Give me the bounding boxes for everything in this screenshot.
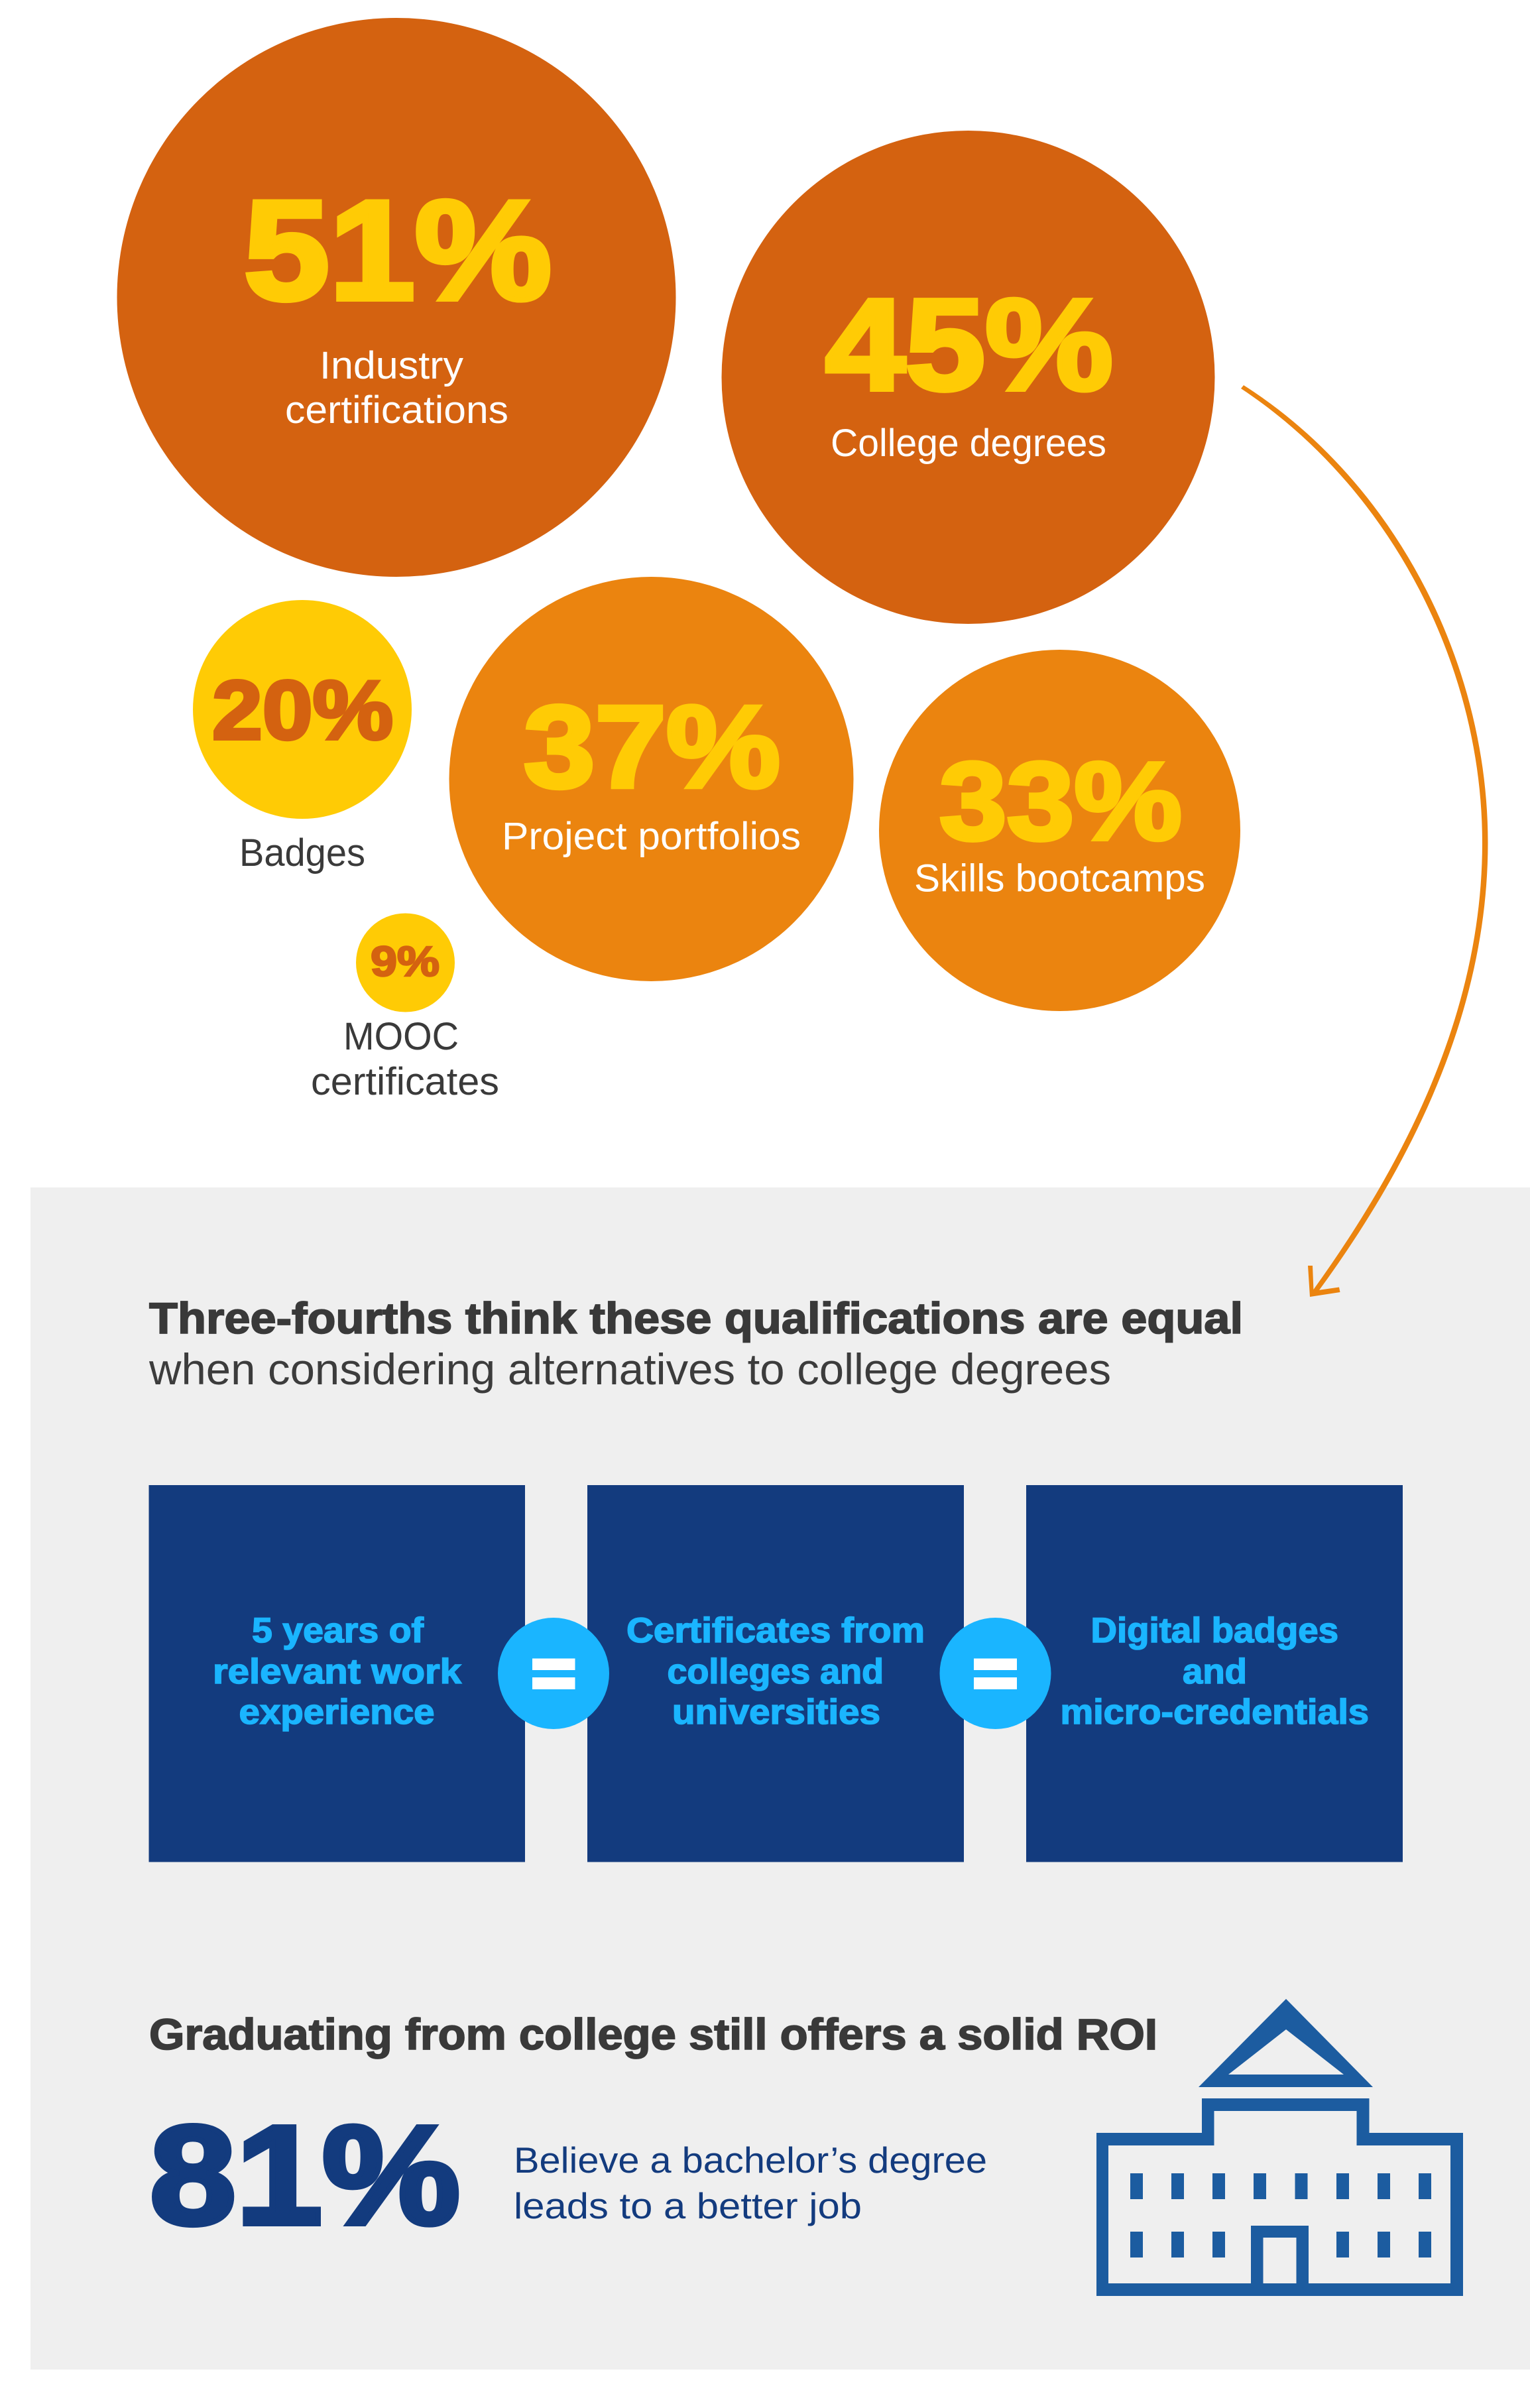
label: MOOC certificates (311, 1015, 499, 1103)
box: 5 years of relevant work experience: 5 years of (252, 1611, 424, 1650)
number: 45%: 45% (825, 272, 1113, 418)
box: 5 years of relevant work experience (148, 1485, 525, 1862)
box: digital badges and micro-credentials: micro-credentials (1061, 1693, 1369, 1732)
label: College degrees: College degrees (831, 422, 1106, 465)
label: Badges: Badges (239, 831, 365, 874)
label: MOOC certificates: certificates (311, 1060, 499, 1103)
stat bubble: 51% industry certifications (117, 18, 676, 577)
arrow: curved from college degrees to panel heading (1241, 385, 1488, 1297)
label: Industry certifications (285, 344, 508, 432)
number: 9%: 9% (371, 937, 440, 985)
heading: three-fourths: when considering alternatives to college degrees (148, 1345, 1111, 1394)
box: certificates from colleges and universities: universities (672, 1693, 880, 1732)
number: 81%: 81% (150, 2096, 460, 2254)
label: Industry certifications: certifications (285, 389, 508, 432)
box: digital badges and micro-credentials: Digital badges (1091, 1611, 1338, 1650)
text: believe a bachelor's degree leads to a better job: Believe a bachelor’s degree (514, 2139, 987, 2181)
stat bubble: 20% badges (193, 600, 412, 874)
stat bubble: 33% skills bootcamps (879, 650, 1240, 1011)
heading: three-fourths: Three-fourths think these qualifications are equal (149, 1294, 1243, 1343)
label: Project portfolios: Project portfolios (502, 815, 801, 858)
box: digital badges and micro-credentials (1026, 1485, 1403, 1862)
label: Skills bootcamps: Skills bootcamps (914, 857, 1205, 900)
icon: equals sign 2 (940, 1618, 1051, 1729)
box: certificates from colleges and universities (587, 1485, 964, 1862)
heading: three-fourths (148, 1294, 1243, 1394)
box: certificates from colleges and universities: colleges and (667, 1652, 884, 1691)
box: 5 years of relevant work experience: relevant work (213, 1652, 462, 1691)
number: 51%: 51% (244, 172, 552, 330)
panel: equivalent qualifications and ROI (30, 1187, 1530, 2370)
number: 37%: 37% (524, 682, 780, 812)
label: Industry certifications: Industry (320, 344, 463, 387)
text: believe a bachelor's degree leads to a better job: leads to a better job (514, 2185, 862, 2226)
text: believe a bachelor's degree leads to a better job (514, 2139, 987, 2226)
number: 20%: 20% (212, 663, 393, 757)
stat bubble: 9% MOOC certificates (311, 914, 499, 1103)
label: MOOC certificates: MOOC (343, 1015, 459, 1058)
number: 33%: 33% (939, 740, 1182, 863)
heading: graduating from college: Graduating from college still offers a solid ROI (149, 2010, 1157, 2059)
box: 5 years of relevant work experience: experience (239, 1693, 435, 1732)
icon: college building (1096, 1999, 1463, 2296)
stat bubble: 37% project portfolios (449, 577, 854, 981)
box: certificates from colleges and universities: Certificates from (626, 1611, 925, 1650)
box: digital badges and micro-credentials: and (1183, 1652, 1247, 1691)
stat bubble: 45% college degrees (721, 131, 1214, 624)
icon: equals sign 1 (498, 1618, 609, 1729)
